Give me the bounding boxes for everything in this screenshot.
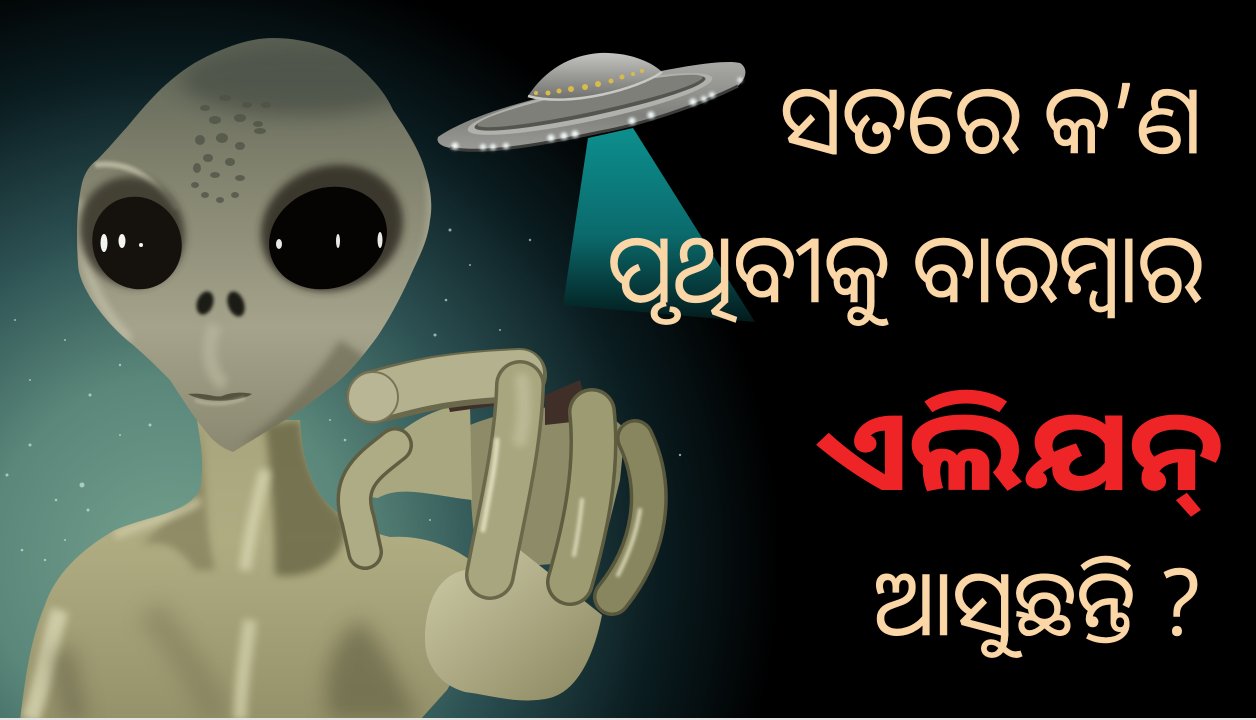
headline text [608,51,1224,663]
alien figure [20,38,649,720]
thumb web and knuckle [350,405,472,500]
saucer dome [528,53,662,100]
bottom edge strip [0,718,1256,720]
ring finger [570,412,593,582]
dark knuckle gaps [445,375,500,412]
alien head [77,38,432,452]
little finger [612,438,649,597]
headline line 4: ଆସୁଛନ୍ତି ? [874,538,1203,663]
headline line 2: ପୃଥିବୀକୁ ବାରମ୍ବାର [608,200,1203,330]
alien nose [193,289,248,319]
wrist [425,550,602,700]
ufo light beam [563,128,755,322]
head shading [180,45,420,115]
alien right eye [243,145,421,311]
alien hand [348,372,649,700]
nose bridge highlight [210,325,225,385]
saucer yellow windows [534,69,644,96]
saucer rim lights [452,78,742,150]
saucer disc [438,62,745,150]
back of hand [470,407,625,570]
alien torso and neck [20,420,470,720]
headline line 1: ସତରେ କ’ଣ [780,51,1202,182]
alien mouth [188,393,252,404]
middle finger [490,385,520,575]
icon: flying saucer [438,53,745,150]
index finger [373,375,520,397]
headline line 3: alien, red: ଏଲିଯନ୍ [815,369,1224,523]
thumb [354,445,395,552]
forehead scales [191,95,271,203]
alien left eye [61,159,203,306]
